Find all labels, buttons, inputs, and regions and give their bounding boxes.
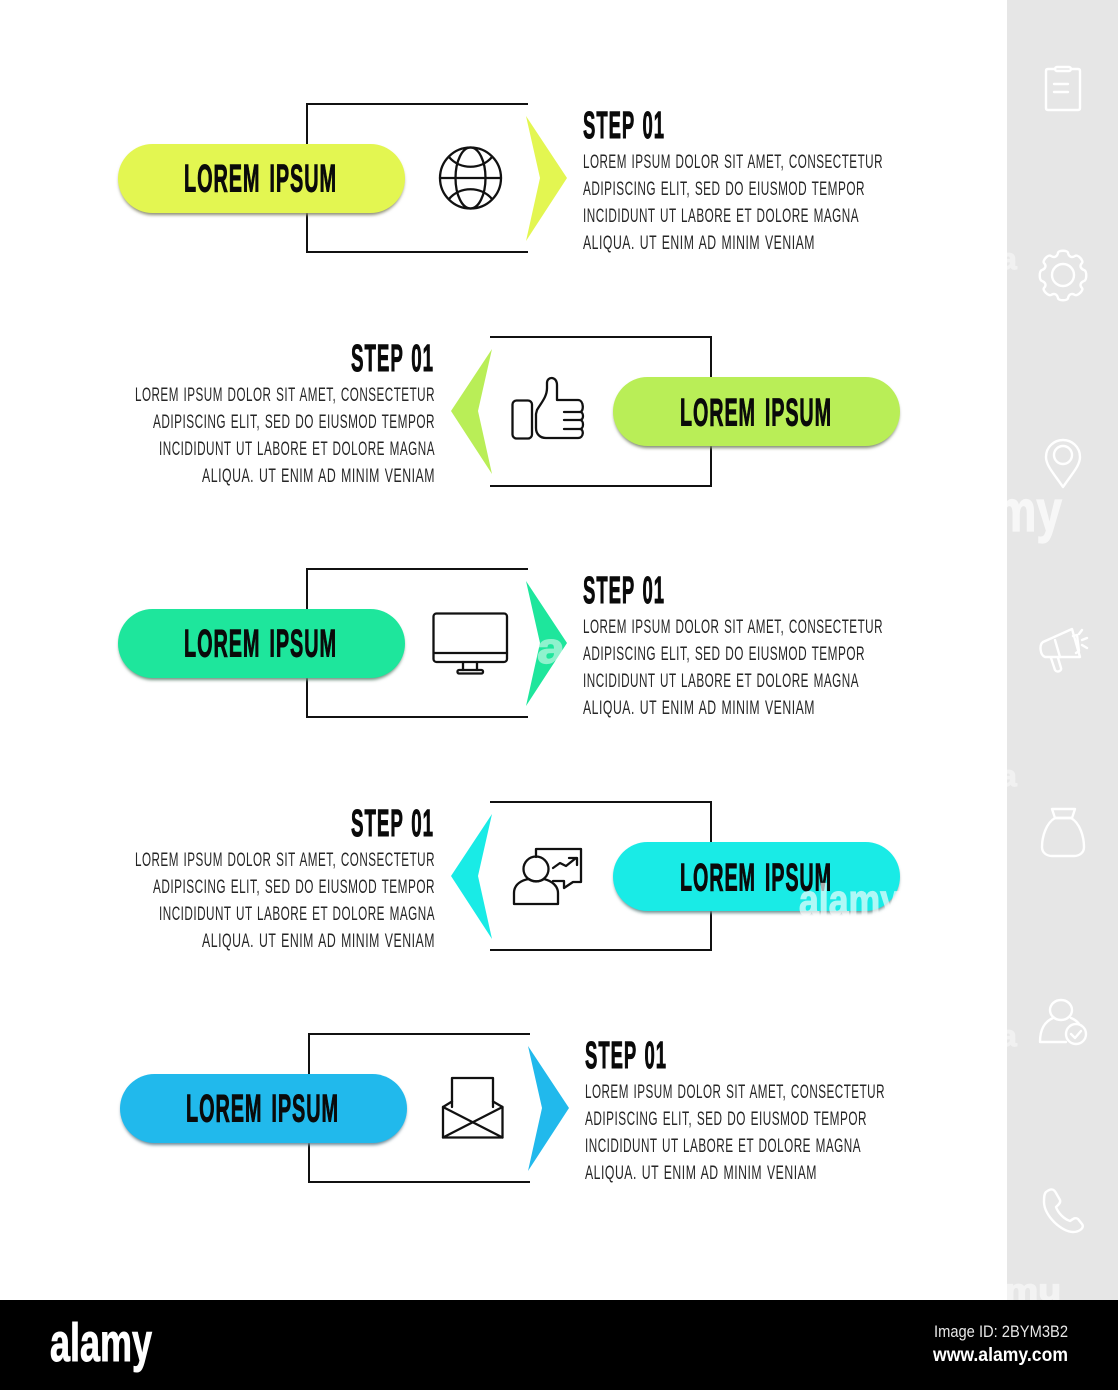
icon: user with check (1040, 1000, 1086, 1044)
description text: LOREM IPSUM DOLOR SIT AMET, CONSECTETUR (135, 850, 435, 871)
panel: step 1: STEP 01 (583, 105, 665, 147)
description text: INCIDIDUNT UT LABORE ET DOLORE MAGNA (583, 206, 859, 227)
icon: money sack (1042, 809, 1084, 856)
panel: step 2 (135, 337, 900, 487)
bracket frame (309, 1034, 530, 1182)
image id: Image ID: 2BYM3B2 (934, 1322, 1068, 1341)
pill label: LOREM IPSUM (184, 158, 337, 200)
watermark fragments (537, 243, 1062, 1307)
description text: ALIQUA. UT ENIM AD MINIM VENIAM (583, 698, 815, 719)
icon: thumbs up (512, 378, 583, 438)
icon: gear (1040, 251, 1086, 300)
watermark fragments: a (537, 624, 566, 673)
description text: ALIQUA. UT ENIM AD MINIM VENIAM (202, 931, 435, 952)
icon: telephone (1044, 1189, 1083, 1232)
pill shadow (119, 612, 404, 680)
arrow chevron (451, 814, 492, 939)
bracket frame (307, 569, 528, 717)
arrow chevron (526, 116, 567, 241)
footer bar (0, 1300, 1118, 1390)
pill shadow (614, 380, 899, 448)
footer logo: alamy (50, 1313, 152, 1373)
description text: LOREM IPSUM DOLOR SIT AMET, CONSECTETUR (583, 617, 883, 638)
description text: ADIPISCING ELIT, SED DO EIUSMOD TEMPOR (153, 877, 435, 898)
panel: step 5 (120, 1034, 885, 1184)
description text: ALIQUA. UT ENIM AD MINIM VENIAM (585, 1163, 817, 1184)
description text: ADIPISCING ELIT, SED DO EIUSMOD TEMPOR (585, 1109, 867, 1130)
bracket frame (490, 337, 711, 486)
description text: LOREM IPSUM DOLOR SIT AMET, CONSECTETUR (583, 152, 883, 173)
watermark fragments: mu (1005, 1274, 1061, 1307)
pill label: LOREM IPSUM (680, 392, 832, 434)
panel: step 4: STEP 01 (351, 803, 434, 845)
description text: INCIDIDUNT UT LABORE ET DOLORE MAGNA (159, 904, 435, 925)
pill label (118, 609, 405, 678)
bracket frame (490, 802, 711, 950)
description text (585, 1082, 885, 1184)
description text: INCIDIDUNT UT LABORE ET DOLORE MAGNA (583, 671, 859, 692)
description text: ALIQUA. UT ENIM AD MINIM VENIAM (202, 466, 435, 487)
watermark fragments: a (1000, 760, 1017, 793)
arrow chevron (528, 1046, 569, 1171)
description text: ALIQUA. UT ENIM AD MINIM VENIAM (583, 233, 815, 254)
pill label (613, 377, 900, 446)
icon: presenter with chart (514, 849, 581, 904)
icon: globe (440, 148, 501, 208)
description text (135, 385, 435, 487)
panel: step 3: STEP 01 (583, 570, 665, 612)
description text: ADIPISCING ELIT, SED DO EIUSMOD TEMPOR (583, 179, 865, 200)
description text: ADIPISCING ELIT, SED DO EIUSMOD TEMPOR (583, 644, 865, 665)
watermark fragments: alamy (799, 876, 900, 925)
pill label: LOREM IPSUM (680, 856, 832, 900)
description text: LOREM IPSUM DOLOR SIT AMET, CONSECTETUR (585, 1082, 885, 1103)
watermark fragments: a (1000, 1020, 1017, 1053)
description text (583, 617, 883, 719)
icon: megaphone (1041, 629, 1087, 671)
description text: INCIDIDUNT UT LABORE ET DOLORE MAGNA (585, 1136, 861, 1157)
panel: step 5: STEP 01 (585, 1035, 667, 1077)
pill label: LOREM IPSUM (186, 1088, 339, 1130)
icon: map pin (1046, 440, 1080, 487)
website: www.alamy.com (932, 1345, 1068, 1366)
watermark fragments: amy (970, 479, 1062, 544)
icon: open envelope (443, 1078, 502, 1138)
description text (135, 850, 435, 952)
icon: clipboard (1046, 67, 1080, 110)
description text: INCIDIDUNT UT LABORE ET DOLORE MAGNA (159, 439, 435, 460)
watermark fragments: a (1000, 243, 1017, 276)
pill shadow (119, 147, 404, 215)
pill shadow (121, 1077, 406, 1145)
bracket frame (307, 104, 528, 252)
arrow chevron (451, 349, 492, 474)
sidebar background (1007, 0, 1118, 1300)
pill label (120, 1074, 407, 1143)
description text (583, 152, 883, 254)
pill label (613, 842, 900, 911)
description text: LOREM IPSUM DOLOR SIT AMET, CONSECTETUR (135, 385, 435, 406)
panel: icon sidebar (1007, 0, 1118, 1300)
pill label (118, 144, 405, 213)
panel: step 3 (118, 569, 883, 719)
arrow chevron (526, 581, 567, 706)
panel: step 2: STEP 01 (351, 338, 434, 380)
description text: ADIPISCING ELIT, SED DO EIUSMOD TEMPOR (153, 412, 435, 433)
pill shadow (614, 845, 899, 913)
pill label: LOREM IPSUM (184, 622, 337, 666)
icon: desktop monitor (434, 614, 507, 674)
panel: step 4 (135, 802, 900, 952)
panel: step 1 (118, 104, 883, 254)
